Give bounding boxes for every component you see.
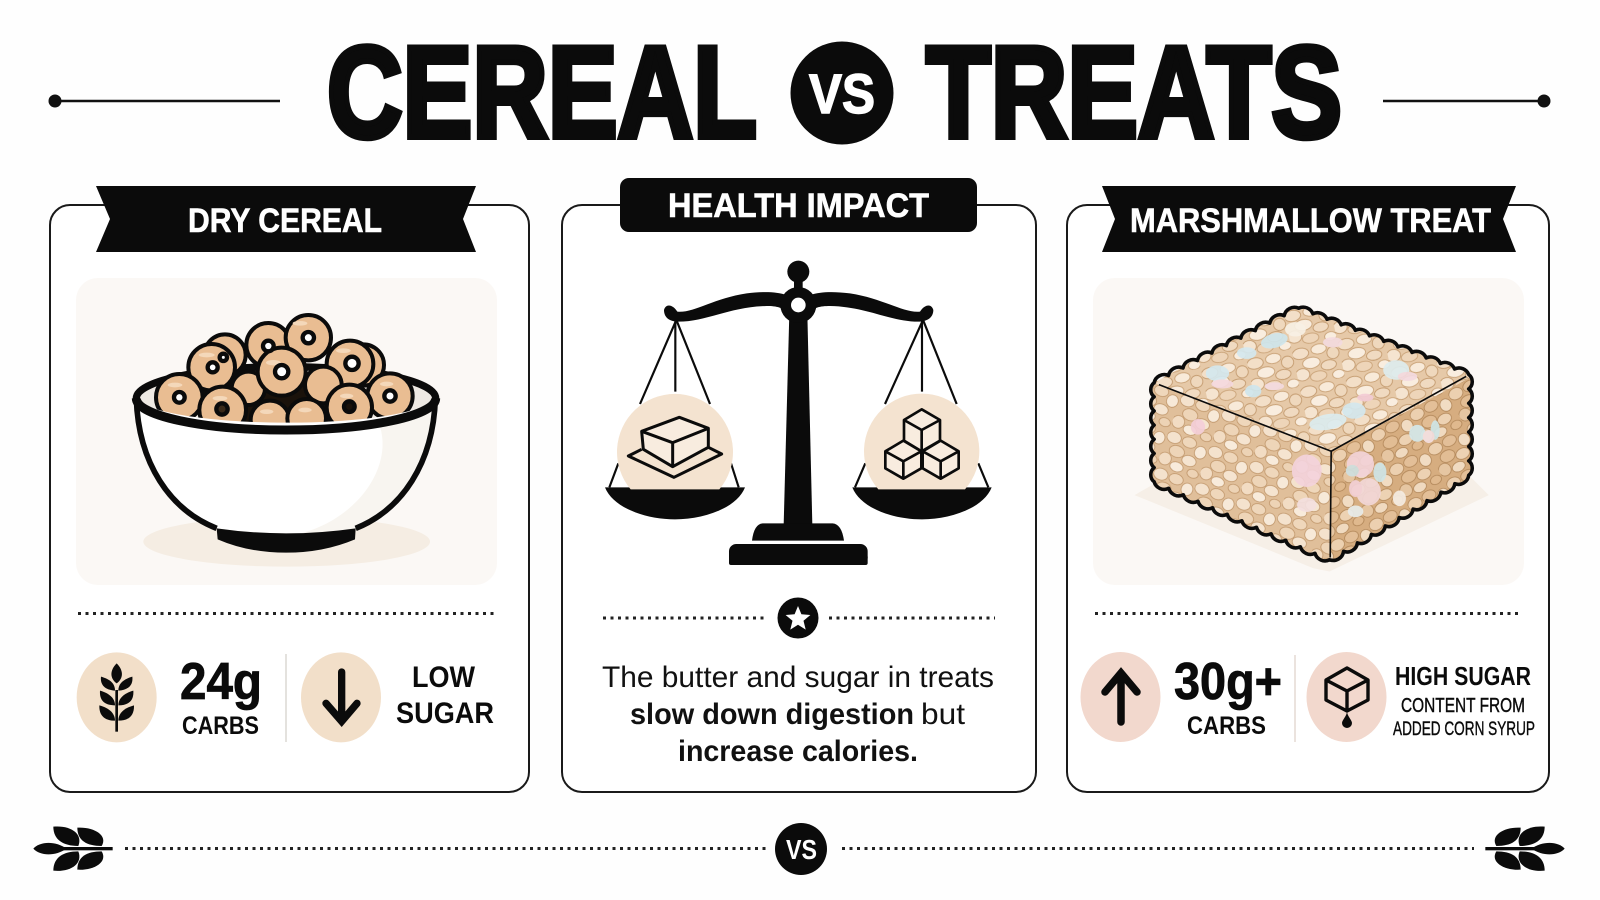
illustration: balance scale (605, 261, 992, 565)
panel: marshmallow treat (1067, 186, 1549, 792)
divider (78, 612, 497, 615)
panel: dry cereal (50, 186, 529, 792)
label: sugar: SUGAR (396, 697, 494, 730)
stat: low sugar (301, 652, 494, 742)
stat: 24g carbs (77, 652, 262, 742)
footer vs badge: VS (786, 834, 817, 865)
right title rule (1383, 95, 1550, 107)
illustration: bowl of cereal (136, 315, 436, 567)
label: carbs: CARBS (1187, 712, 1266, 740)
body text: but (921, 698, 966, 731)
divider (1095, 612, 1520, 615)
pan: butter (605, 394, 745, 519)
stat divider (285, 654, 287, 742)
footer dotted rule left (125, 847, 770, 850)
banner: health impact: HEALTH IMPACT (668, 187, 929, 225)
icon: left wheat sprig (33, 826, 113, 871)
banner: dry cereal: DRY CEREAL (188, 202, 382, 240)
footer (33, 823, 1565, 875)
title word: treats: TREATS (926, 19, 1342, 165)
label: content from: CONTENT FROM (1401, 695, 1525, 717)
title (49, 19, 1550, 165)
stat: 30g+ carbs (1080, 652, 1282, 742)
image tile: treat (1093, 278, 1524, 585)
stat divider (1294, 655, 1296, 742)
icon: down arrow (301, 652, 381, 742)
body text: slow down digestion (630, 698, 914, 731)
icon: up arrow (1080, 652, 1160, 742)
stat: high sugar (1306, 652, 1535, 742)
body text (602, 661, 994, 768)
divider with star (603, 598, 995, 638)
illustration: marshmallow treat (1135, 300, 1489, 571)
vs badge: VS (809, 62, 875, 125)
panel: health impact (562, 178, 1036, 792)
icon: syrup cube (1306, 652, 1386, 742)
vs badge (790, 42, 894, 144)
icon: wheat (77, 652, 157, 742)
label: carbs: CARBS (182, 712, 259, 740)
banner: health impact (620, 178, 977, 232)
footer vs badge (775, 823, 827, 875)
left title rule (49, 95, 280, 107)
image tile: cereal (76, 278, 497, 585)
icon: right wheat sprig (1485, 826, 1565, 871)
value: 24g: 24g (180, 653, 262, 711)
title word: cereal: CEREAL (327, 19, 757, 165)
pan: sugar cubes (852, 394, 992, 519)
label: high sugar: HIGH SUGAR (1395, 661, 1531, 691)
banner: marshmallow treat (1102, 186, 1516, 252)
label: low: LOW (412, 661, 476, 694)
banner: dry cereal (96, 186, 476, 252)
footer dotted rule right (842, 847, 1474, 850)
label: added corn syrup: ADDED CORN SYRUP (1393, 719, 1535, 740)
value: 30g+: 30g+ (1174, 653, 1282, 711)
banner: marshmallow treat: MARSHMALLOW TREAT (1130, 202, 1491, 240)
body text: The butter and sugar in treats (602, 661, 994, 694)
body text: increase calories. (678, 735, 918, 768)
